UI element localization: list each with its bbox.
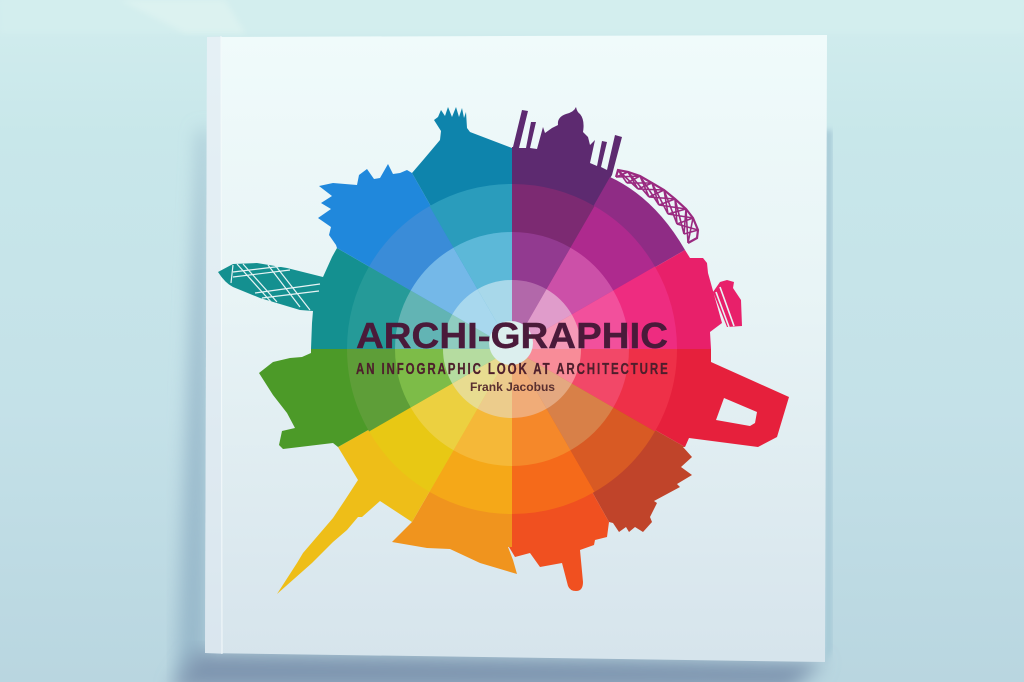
silhouette: purple palace with minarets (512, 107, 622, 349)
book cover (205, 35, 827, 662)
silhouette: magenta stadium body (512, 177, 685, 349)
silhouette: lattice stadium roof (616, 170, 698, 243)
silhouette: brick skyline (512, 349, 692, 532)
silhouette: yellow spire (277, 349, 512, 594)
silhouette: pink hotel (512, 250, 722, 349)
silhouette: teal gherkin (218, 248, 512, 349)
author: Frank Jacobus (470, 380, 555, 394)
ring: inner band (443, 280, 581, 418)
wheel hub (489, 321, 533, 365)
colour wheel with building silhouettes (218, 107, 789, 594)
silhouette: orange roof (392, 349, 517, 574)
ring: outer band (347, 184, 677, 514)
title: ARCHI-GRAPHIC (356, 315, 668, 356)
silhouette: orange-red tower (509, 349, 609, 591)
silhouette: pink ship-shaped tower (713, 280, 742, 327)
silhouette: cyan crown dome (412, 107, 512, 349)
subtitle: AN INFOGRAPHIC LOOK AT ARCHITECTURE (356, 359, 668, 377)
silhouette: green museum (259, 349, 512, 449)
silhouette: red cantilevered building (512, 349, 789, 447)
ring: middle band (395, 232, 629, 466)
silhouette: blue opera house (318, 164, 512, 349)
